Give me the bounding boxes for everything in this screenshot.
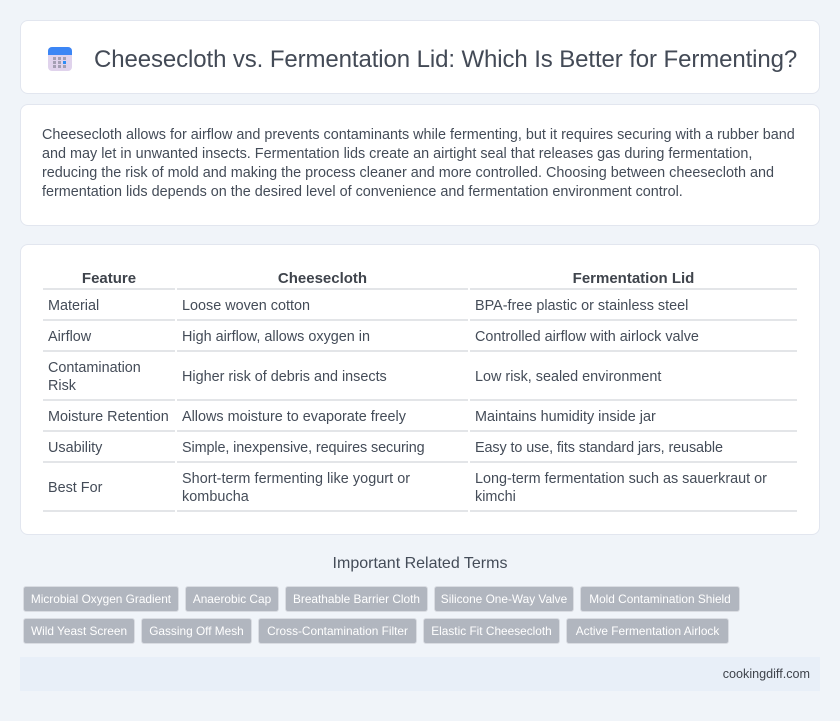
comparison table panel: Controlled airflow with airlock valve — [475, 329, 699, 345]
related term chips: Mold Contamination Shield — [589, 592, 731, 606]
related term chips: Elastic Fit Cheesecloth — [431, 624, 552, 638]
comparison table panel: Long-term fermentation such as sauerkraut or — [475, 471, 767, 487]
comparison table panel: Maintains humidity inside jar — [475, 409, 656, 425]
row: airflow: Airflow — [48, 329, 91, 345]
comparison table panel: Allows moisture to evaporate freely — [182, 409, 406, 425]
comparison table panel: Simple, inexpensive, requires securing — [182, 440, 425, 456]
row: usability: Usability — [48, 440, 102, 456]
related term chips: Wild Yeast Screen — [31, 624, 127, 638]
title: Cheesecloth vs. Fermentation Lid: Which Is Better for Fermenting? — [94, 46, 797, 73]
icon: calendar — [48, 47, 72, 71]
related term chips: Anaerobic Cap — [193, 592, 271, 606]
row: moisture retention: Moisture Retention — [48, 409, 169, 425]
intro paragraph: Cheesecloth allows for airflow and prevents contaminants while fermenting, but it requires securing with a rubber band — [42, 127, 795, 143]
comparison table panel: High airflow, allows oxygen in — [182, 329, 370, 345]
row: contamination risk — [48, 360, 141, 394]
intro paragraph: reducing the risk of mold and making the process cleaner and more controlled. Choosing between cheesecloth and — [42, 165, 774, 181]
related term chips: Gassing Off Mesh — [149, 624, 244, 638]
row: contamination risk: Risk — [48, 378, 76, 394]
intro paragraph: fermentation lids depends on the desired level of convenience and fermentation environment control. — [42, 184, 683, 200]
comparison table panel — [20, 244, 820, 535]
related term chips: Active Fermentation Airlock — [576, 624, 719, 638]
related term chips: Microbial Oxygen Gradient — [31, 592, 171, 606]
related term chips: Silicone One-Way Valve — [441, 592, 567, 606]
comparison table panel: kimchi — [475, 489, 516, 505]
row: material: Material — [48, 298, 99, 314]
comparison table panel: Low risk, sealed environment — [475, 369, 661, 385]
comparison table panel: Loose woven cotton — [182, 298, 310, 314]
row: best for: Best For — [48, 480, 102, 496]
comparison table panel: BPA-free plastic or stainless steel — [475, 298, 688, 314]
intro text panel — [20, 104, 820, 226]
table header: feature: Feature — [82, 270, 136, 287]
table header: cheesecloth: Cheesecloth — [278, 270, 367, 287]
source label: cookingdiff.com — [723, 667, 810, 681]
related term chips: Breathable Barrier Cloth — [293, 592, 420, 606]
footer bar — [20, 657, 820, 691]
table header: fermentation lid: Fermentation Lid — [573, 270, 694, 287]
intro paragraph — [42, 127, 795, 200]
related term chips — [23, 586, 740, 644]
comparison table panel: Short-term fermenting like yogurt or — [182, 471, 410, 487]
comparison table panel: Easy to use, fits standard jars, reusable — [475, 440, 723, 456]
comparison table panel: Higher risk of debris and insects — [182, 369, 387, 385]
intro paragraph: and may let in unwanted insects. Fermentation lids create an airtight seal that releases gas during fermentation, — [42, 146, 752, 162]
related terms heading: Important Related Terms — [333, 555, 507, 572]
header card — [20, 20, 820, 94]
row: contamination risk: Contamination — [48, 360, 141, 376]
comparison table panel: kombucha — [182, 489, 249, 505]
related term chips: Cross-Contamination Filter — [267, 624, 408, 638]
